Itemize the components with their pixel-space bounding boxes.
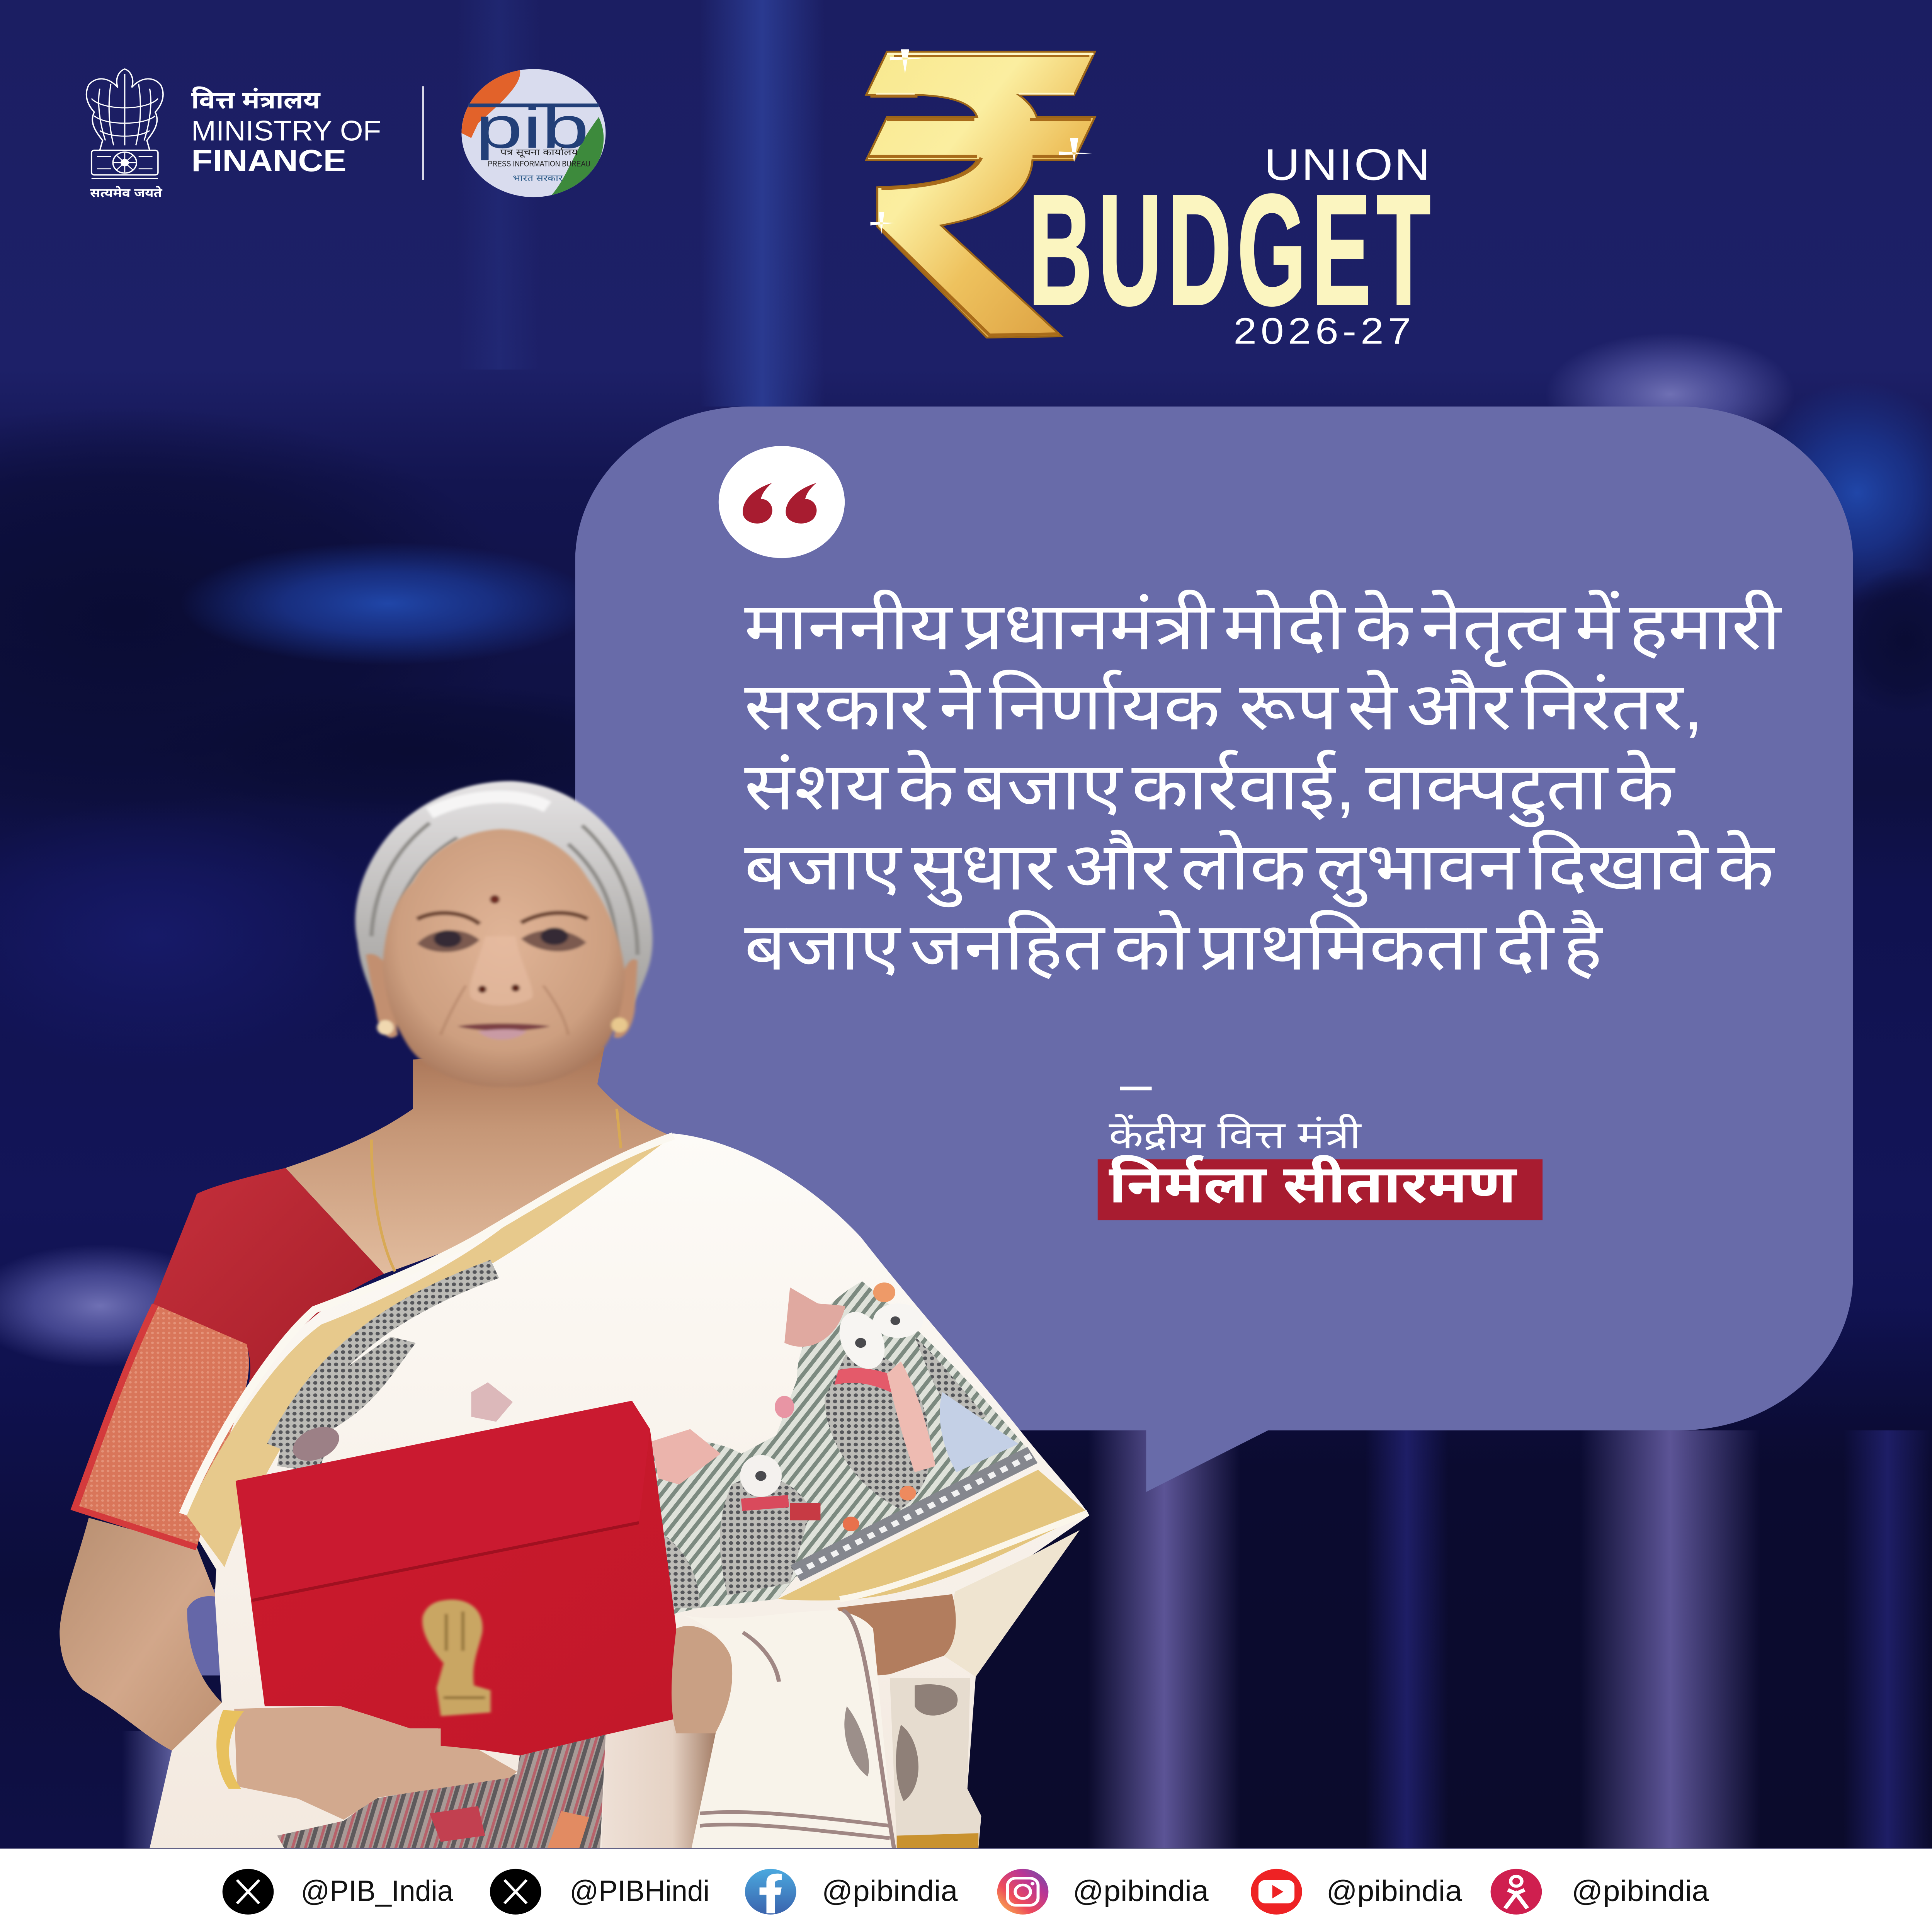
social: YouTube: @pibindia bbox=[1327, 1874, 1463, 1908]
logo: PIB: पत्र सूचना कार्यालय bbox=[500, 147, 578, 158]
drape embroidery bbox=[896, 1684, 957, 1801]
draped cloth stitching bbox=[700, 1610, 894, 1848]
quote text bbox=[744, 589, 1782, 984]
social: X @PIBHindi bbox=[490, 1869, 709, 1915]
social: Instagram bbox=[997, 1869, 1209, 1915]
saree lower right panel bbox=[890, 1678, 981, 1842]
sleeve band bbox=[75, 1304, 249, 1548]
quote text: संशय के बजाए कार्रवाई, वाक्पटुता के bbox=[744, 749, 1675, 828]
social: X @PIBHindi: @PIBHindi bbox=[570, 1874, 709, 1908]
saree gold border left bbox=[186, 1139, 668, 1567]
title: year: 2026-27 bbox=[1233, 310, 1411, 352]
logo: PIB: PRESS INFORMATION BUREAU bbox=[488, 159, 590, 168]
left arm bbox=[60, 1518, 238, 1774]
gold emblem on folder bbox=[422, 1600, 491, 1716]
saree dotted border right bbox=[796, 1455, 1032, 1573]
ministry name: FINANCE bbox=[191, 143, 347, 178]
saree motif above folder bbox=[277, 1337, 513, 1472]
social: Koo-style figure bbox=[1491, 1869, 1709, 1915]
hands bbox=[216, 1626, 732, 1820]
quote text: बजाए सुधार और लोक लुभावन दिखावे के bbox=[744, 829, 1776, 908]
face bbox=[366, 829, 638, 1087]
saree bottom trim bbox=[897, 1833, 978, 1848]
saree lower pattern bbox=[277, 1735, 605, 1848]
social: X @PIB_India bbox=[223, 1869, 454, 1915]
neck and chest bbox=[286, 1047, 679, 1274]
icon: national emblem bbox=[87, 69, 163, 179]
saree gold white edge bbox=[183, 1136, 673, 1514]
title: UNION: UNION bbox=[1264, 139, 1430, 189]
attribution role: केंद्रीय वित्त मंत्री bbox=[1109, 1114, 1362, 1156]
drape paisley bbox=[844, 1706, 869, 1777]
title: BUDGET: BUDGET bbox=[1028, 162, 1436, 338]
ministry name: MINISTRY OF bbox=[191, 115, 381, 146]
social: Instagram: @pibindia bbox=[1073, 1874, 1209, 1908]
saree gold border right bbox=[777, 1470, 1088, 1600]
quote text: बजाए जनहित को प्राथमिकता दी है bbox=[744, 909, 1603, 984]
saree under cloth bbox=[602, 1656, 730, 1848]
saree dotted border left bbox=[277, 1269, 495, 1447]
saree main bbox=[150, 1133, 1089, 1848]
social: Facebook bbox=[745, 1869, 958, 1915]
logo: PIB: pib bbox=[475, 94, 589, 160]
quote text: माननीय प्रधानमंत्री मोदी के नेतृत्व में हमारी bbox=[744, 589, 1782, 667]
necklace bbox=[371, 1109, 621, 1271]
social: Facebook: @pibindia bbox=[822, 1874, 958, 1908]
social: X @PIB_India: @PIB_India bbox=[301, 1874, 454, 1908]
attribution dash bbox=[1120, 1087, 1152, 1090]
logo: PIB: भारत सरकार bbox=[513, 173, 563, 183]
red folder bbox=[236, 1401, 682, 1755]
blouse bbox=[153, 1168, 384, 1398]
right forearm bbox=[837, 1594, 956, 1675]
attribution name: निर्मला सीतारमण bbox=[1109, 1155, 1517, 1214]
logo: PIB bbox=[461, 69, 605, 200]
saree white fold edge bbox=[840, 1513, 1088, 1599]
footer strip bbox=[0, 1849, 1932, 1932]
saree fish motifs bbox=[651, 1281, 1032, 1614]
draped cloth bbox=[673, 1610, 894, 1848]
emblem motto: सत्यमेव जयते bbox=[90, 186, 163, 200]
photo: finance minister illustration bbox=[60, 781, 1089, 1848]
hair bbox=[355, 781, 653, 1037]
social: YouTube bbox=[1251, 1869, 1463, 1915]
icon: gold rupee symbol bbox=[866, 49, 1095, 338]
icon: quotation mark bbox=[719, 446, 845, 558]
ministry name bbox=[191, 86, 381, 178]
quote text: सरकार ने निर्णायक रूप से और निरंतर, bbox=[744, 669, 1703, 743]
header divider bbox=[422, 86, 424, 180]
sleeve red edge bbox=[75, 1304, 197, 1548]
saree underfold bbox=[944, 1530, 1080, 1677]
speech bubble panel bbox=[575, 406, 1853, 1492]
ministry name: वित्त मंत्रालय bbox=[191, 86, 321, 114]
social: Koo-style figure: @pibindia bbox=[1571, 1874, 1709, 1908]
